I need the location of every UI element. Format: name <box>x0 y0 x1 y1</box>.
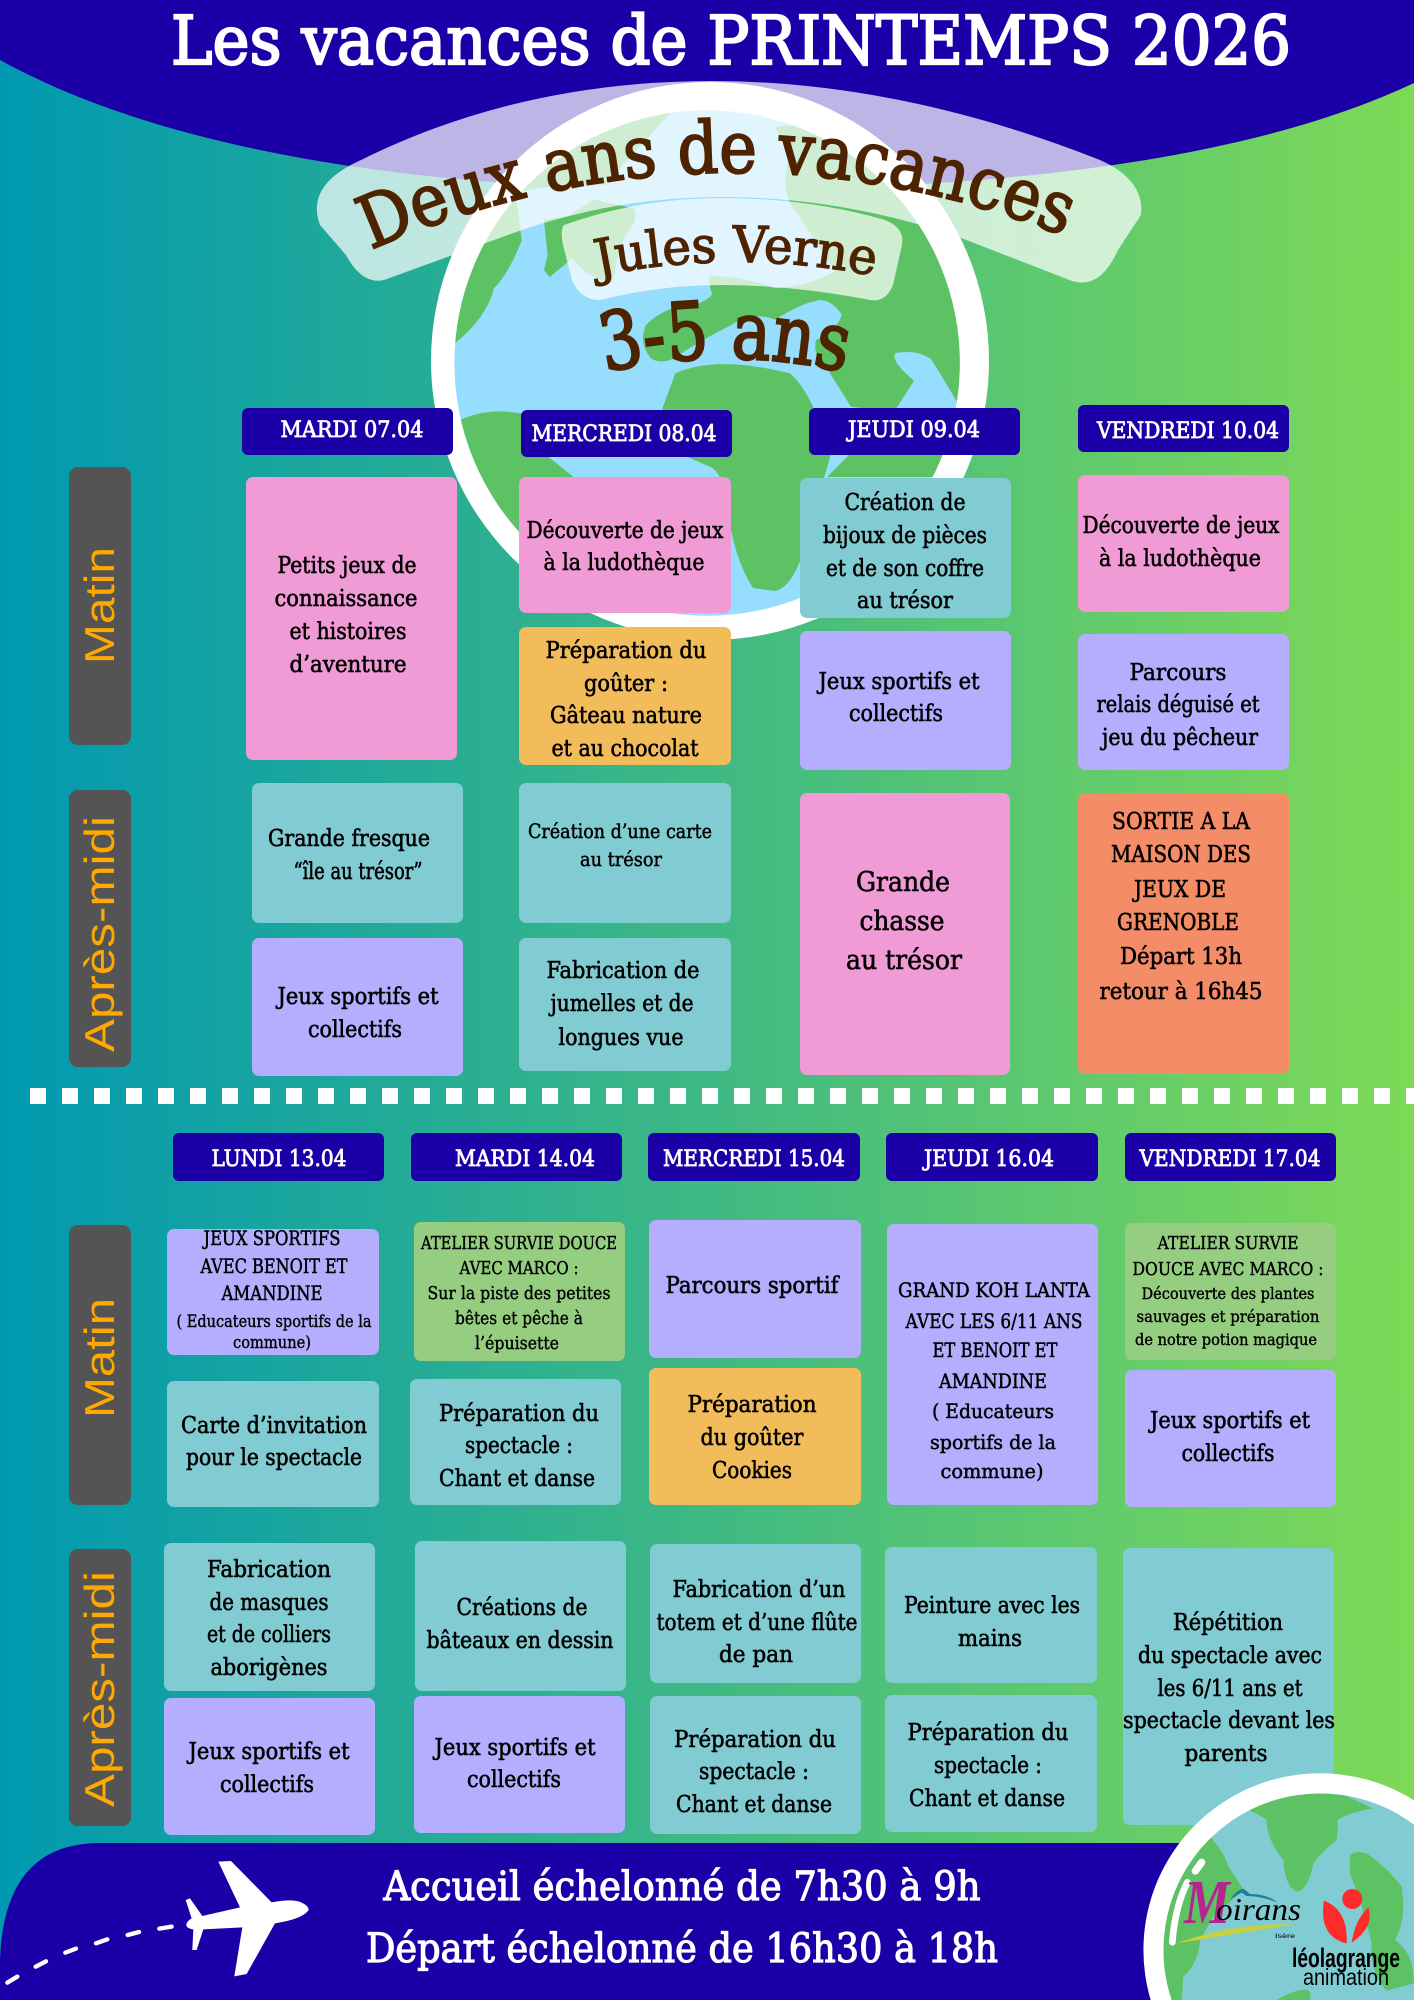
side label: Matin week 2 <box>69 1225 131 1505</box>
card: Fabrication de masques: et de colliers <box>207 1622 331 1648</box>
card: Jeux sportifs lundi: Jeux sportifs et <box>187 1739 350 1765</box>
card: Création d'une carte: Création d’une carte <box>528 819 712 843</box>
card: Création d'une carte <box>519 783 731 923</box>
card: Fabrication d'un totem <box>650 1544 861 1683</box>
card: Atelier survie douce vendredi <box>1125 1223 1336 1360</box>
card: Carte d'invitation: Carte d’invitation <box>181 1413 367 1439</box>
side label: Matin week 1: Matin <box>76 547 123 664</box>
card: Sortie: Départ 13h <box>1120 944 1242 970</box>
card: Parcours sportif: Parcours sportif <box>666 1273 840 1299</box>
card: Sortie: SORTIE A LA <box>1112 809 1250 835</box>
card: Fabrication de jumelles: Fabrication de <box>546 958 700 984</box>
card: Jeux sportifs avec Benoit: AVEC BENOIT ET <box>200 1254 348 1278</box>
card: Carte d'invitation: pour le spectacle <box>186 1445 362 1471</box>
day header: Jeudi 09.04 <box>809 408 1020 455</box>
card: Grand Koh Lanta: ET BENOIT ET <box>932 1338 1058 1362</box>
header band <box>0 0 1414 190</box>
card: Jeux sportifs vendredi <box>1125 1370 1336 1507</box>
card: Découverte de jeux vendredi <box>1078 475 1289 612</box>
card: Découverte de jeux vendredi: à la ludothèque <box>1099 546 1261 572</box>
day header: Lundi 13.04: LUNDI 13.04 <box>212 1147 346 1172</box>
card: Grand Koh Lanta: AMANDINE <box>938 1369 1047 1393</box>
card: Répétition du spectacle <box>1123 1548 1335 1825</box>
card: Jeux sportifs jeudi: collectifs <box>849 701 943 727</box>
card: Découverte de jeux mercredi: Découverte de jeux <box>526 518 724 544</box>
card: Fabrication de jumelles: jumelles et de <box>548 991 694 1017</box>
day header: Mercredi 08.04 <box>521 410 732 457</box>
curved subtitle: Jules Verne: Jules Verne <box>592 224 875 286</box>
card: Préparation du goûter cookies <box>649 1368 861 1505</box>
globe illustration <box>431 82 989 640</box>
card: Atelier survie douce vendredi: sauvages et préparation <box>1136 1307 1320 1326</box>
corner globe with logos: oirans <box>1216 1891 1301 1927</box>
card: Jeux sportifs avec Benoit: JEUX SPORTIFS <box>202 1226 340 1250</box>
card: Création de bijoux: Création de <box>844 490 966 516</box>
card: Jeux sportifs avec Benoit: ( Educateurs sportifs de la <box>176 1312 372 1332</box>
footer text: accueil: Accueil échelonné de 7h30 à 9h <box>383 1864 980 1910</box>
card: Jeux sportifs jeudi: Jeux sportifs et <box>817 669 980 695</box>
card: Carte d'invitation <box>167 1381 379 1507</box>
day header: Mercredi 15.04: MERCREDI 15.04 <box>663 1147 845 1172</box>
card: Jeux sportifs vendredi: collectifs <box>1182 1441 1274 1467</box>
card: Grande fresque: “île au trésor” <box>294 859 422 885</box>
side label: Matin week 1 <box>69 467 131 745</box>
card: Jeux sportifs jeudi <box>800 631 1011 770</box>
card: Atelier survie douce mardi: AVEC MARCO : <box>459 1258 578 1279</box>
card: Préparation du goûter: et au chocolat <box>552 736 699 762</box>
card: Répétition du spectacle: les 6/11 ans et <box>1158 1676 1303 1702</box>
day header: Vendredi 17.04: VENDREDI 17.04 <box>1139 1147 1320 1172</box>
card: Grande chasse: au trésor <box>846 945 962 976</box>
card: Jeux sportifs mardi semaine 2: collectifs <box>467 1767 561 1793</box>
card: Préparation du spectacle mercredi: Préparation du <box>674 1727 836 1753</box>
card: Jeux sportifs mardi: collectifs <box>308 1017 402 1043</box>
side label: Matin week 2: Matin <box>76 1298 123 1418</box>
card: Créations de bâteaux <box>415 1541 626 1691</box>
card: Parcours sportif <box>649 1220 861 1358</box>
day header: Mercredi 08.04: MERCREDI 08.04 <box>532 422 716 447</box>
curved age: 3-5 ans: 3-5 ans <box>600 300 848 372</box>
day header: Mardi 14.04: MARDI 14.04 <box>455 1147 595 1172</box>
card: Jeux sportifs vendredi: Jeux sportifs et <box>1148 1408 1311 1434</box>
card: Grand Koh Lanta: AVEC LES 6/11 ANS <box>905 1309 1082 1333</box>
card: Peinture avec les mains: Peinture avec les <box>904 1593 1080 1619</box>
card: Petits jeux <box>246 477 457 760</box>
card: Grand Koh Lanta <box>887 1224 1098 1505</box>
day header: Mardi 07.04 <box>242 408 453 455</box>
day header: Vendredi 10.04 <box>1078 405 1289 452</box>
card: Fabrication d'un totem: de pan <box>719 1642 793 1668</box>
day header: Mardi 14.04 <box>411 1133 622 1181</box>
card: Préparation du spectacle jeudi: Chant et danse <box>909 1786 1065 1812</box>
card: Répétition du spectacle: parents <box>1184 1741 1268 1767</box>
card: Préparation du spectacle jeudi: Préparation du <box>908 1720 1068 1746</box>
card: Petits jeux: connaissance <box>274 586 418 612</box>
side label: Après-midi week 1 <box>69 790 131 1067</box>
card: Création d'une carte: au trésor <box>580 847 662 871</box>
card: Sortie: JEUX DE <box>1132 877 1226 903</box>
corner globe with logos: Isère <box>1275 1934 1296 1940</box>
card: Répétition du spectacle: Répétition <box>1173 1610 1283 1636</box>
card: Création de bijoux: et de son coffre <box>826 556 984 582</box>
card: Préparation du goûter cookies: Cookies <box>712 1458 792 1484</box>
footer band <box>0 1843 1200 2000</box>
week separator <box>30 1088 1414 1104</box>
day header: Jeudi 16.04 <box>886 1133 1098 1181</box>
card: Peinture avec les mains: mains <box>958 1626 1022 1652</box>
card: Préparation du goûter: Gâteau nature <box>550 703 702 729</box>
card: Parcours relais: relais déguisé et <box>1096 692 1260 718</box>
day header: Lundi 13.04 <box>173 1133 384 1181</box>
card: Fabrication d'un totem: totem et d’une flûte <box>656 1610 858 1636</box>
logo text: Moirans: M <box>1183 1869 1232 1937</box>
card: Grand Koh Lanta: sportifs de la <box>930 1430 1056 1454</box>
card: Atelier survie douce vendredi: Découverte des plantes <box>1142 1284 1314 1303</box>
side label: Après-midi week 1: Après-midi <box>76 816 123 1052</box>
card: Grande chasse: Grande <box>856 867 950 898</box>
card: Grande chasse <box>800 793 1010 1075</box>
card: Découverte de jeux mercredi: à la ludothèque <box>544 550 704 576</box>
card: Préparation du spectacle mercredi <box>650 1696 861 1834</box>
card: Fabrication de masques: aborigènes <box>210 1655 328 1681</box>
card: Fabrication de jumelles: longues vue <box>558 1025 684 1051</box>
card: Préparation du spectacle mardi <box>410 1379 621 1505</box>
card: Grande chasse: chasse <box>860 906 944 937</box>
card: Préparation du goûter <box>519 627 731 765</box>
card: Création de bijoux <box>800 478 1011 618</box>
card: Atelier survie douce mardi: l’épuisette <box>475 1333 559 1354</box>
card: Atelier survie douce vendredi: de notre potion magique <box>1135 1330 1317 1349</box>
card: Création de bijoux: bijoux de pièces <box>823 523 987 549</box>
card: Sortie <box>1078 793 1289 1074</box>
day header: Jeudi 09.04: JEUDI 09.04 <box>846 418 980 443</box>
card: Préparation du goûter cookies: du goûter <box>700 1425 804 1451</box>
subtitle banner <box>562 198 902 300</box>
card: Jeux sportifs mardi semaine 2 <box>414 1696 625 1833</box>
card: Atelier survie douce mardi: ATELIER SURVIE DOUCE <box>420 1233 617 1254</box>
corner globe with logos: animation <box>1303 1964 1389 1990</box>
card: Répétition du spectacle: du spectacle avec <box>1138 1643 1322 1669</box>
card: Atelier survie douce mardi: bêtes et pêche à <box>455 1308 583 1329</box>
card: Petits jeux: d’aventure <box>290 652 406 678</box>
card: Fabrication d'un totem: Fabrication d’un <box>672 1577 846 1603</box>
card: Atelier survie douce mardi <box>414 1222 625 1361</box>
card: Préparation du spectacle jeudi <box>885 1695 1097 1832</box>
card: Créations de bâteaux: bâteaux en dessin <box>426 1628 614 1654</box>
card: Jeux sportifs avec Benoit <box>167 1226 379 1355</box>
curved title: Deux ans de vacances: Deux ans de vacances <box>352 117 1073 250</box>
card: Créations de bâteaux: Créations de <box>456 1595 588 1621</box>
card: Préparation du spectacle mercredi: spectacle : <box>699 1759 809 1785</box>
card: Parcours relais: jeu du pêcheur <box>1099 725 1258 751</box>
card: Fabrication de masques <box>164 1543 375 1691</box>
icon: airplane with dashed trail <box>7 1861 309 1983</box>
card: Petits jeux: et histoires <box>290 619 406 645</box>
title banner <box>317 81 1141 283</box>
card: Grand Koh Lanta: ( Educateurs <box>932 1399 1054 1423</box>
card: Jeux sportifs avec Benoit: AMANDINE <box>221 1281 322 1305</box>
card: Jeux sportifs mardi semaine 2: Jeux sportifs et <box>433 1735 596 1761</box>
card: Préparation du goûter: goûter : <box>584 671 668 697</box>
card: Création de bijoux: au trésor <box>857 588 953 614</box>
card: Atelier survie douce vendredi: ATELIER SURVIE <box>1157 1233 1298 1254</box>
card: Répétition du spectacle: spectacle devant les <box>1123 1708 1335 1734</box>
card: Atelier survie douce mardi: Sur la piste des petites <box>428 1283 610 1304</box>
day header: Jeudi 16.04: JEUDI 16.04 <box>922 1147 1054 1172</box>
title: Les vacances de PRINTEMPS 2026 <box>171 2 1291 80</box>
card: Grand Koh Lanta: GRAND KOH LANTA <box>898 1278 1090 1302</box>
card: Jeux sportifs mardi: Jeux sportifs et <box>276 984 439 1010</box>
card: Jeux sportifs mardi <box>252 938 463 1076</box>
card: Fabrication de masques: de masques <box>210 1590 328 1616</box>
card: Grand Koh Lanta: commune) <box>940 1459 1044 1483</box>
card: Atelier survie douce vendredi: DOUCE AVEC MARCO : <box>1132 1259 1324 1280</box>
card: Préparation du spectacle jeudi: spectacle : <box>934 1753 1042 1779</box>
card: Sortie: retour à 16h45 <box>1100 979 1262 1005</box>
card: Grande fresque: Grande fresque <box>268 826 430 852</box>
card: Préparation du spectacle mardi: Chant et danse <box>439 1466 595 1492</box>
day header: Mardi 07.04: MARDI 07.04 <box>280 418 424 443</box>
card: Sortie: MAISON DES <box>1111 842 1251 868</box>
card: Préparation du spectacle mardi: Préparation du <box>439 1401 599 1427</box>
card: Jeux sportifs lundi: collectifs <box>220 1772 314 1798</box>
card: Découverte de jeux vendredi: Découverte de jeux <box>1082 513 1280 539</box>
corner globe with logos <box>1143 1773 1414 2000</box>
card: Parcours relais <box>1078 634 1289 770</box>
day header: Vendredi 17.04 <box>1125 1133 1336 1181</box>
card: Petits jeux: Petits jeux de <box>278 553 416 579</box>
side label: Après-midi week 2: Après-midi <box>76 1571 123 1807</box>
day header: Mercredi 15.04 <box>648 1133 860 1181</box>
card: Préparation du spectacle mardi: spectacle : <box>465 1433 573 1459</box>
card: Peinture avec les mains <box>885 1547 1097 1683</box>
day header: Vendredi 10.04: VENDREDI 10.04 <box>1096 419 1279 444</box>
footer text: départ: Départ échelonné de 16h30 à 18h <box>366 1926 998 1972</box>
card: Préparation du goûter cookies: Préparation <box>688 1392 817 1418</box>
card: Grande fresque <box>252 783 463 923</box>
card: Fabrication de masques: Fabrication <box>207 1557 331 1583</box>
card: Préparation du goûter: Préparation du <box>546 638 706 664</box>
card: Parcours relais: Parcours <box>1130 660 1226 686</box>
side label: Après-midi week 2 <box>69 1549 131 1826</box>
card: Sortie: GRENOBLE <box>1117 910 1239 936</box>
card: Jeux sportifs avec Benoit: commune) <box>233 1333 311 1353</box>
card: Préparation du spectacle mercredi: Chant et danse <box>676 1792 832 1818</box>
card: Fabrication de jumelles <box>519 938 731 1071</box>
card: Jeux sportifs lundi <box>164 1698 375 1835</box>
card: Découverte de jeux mercredi <box>519 477 731 613</box>
